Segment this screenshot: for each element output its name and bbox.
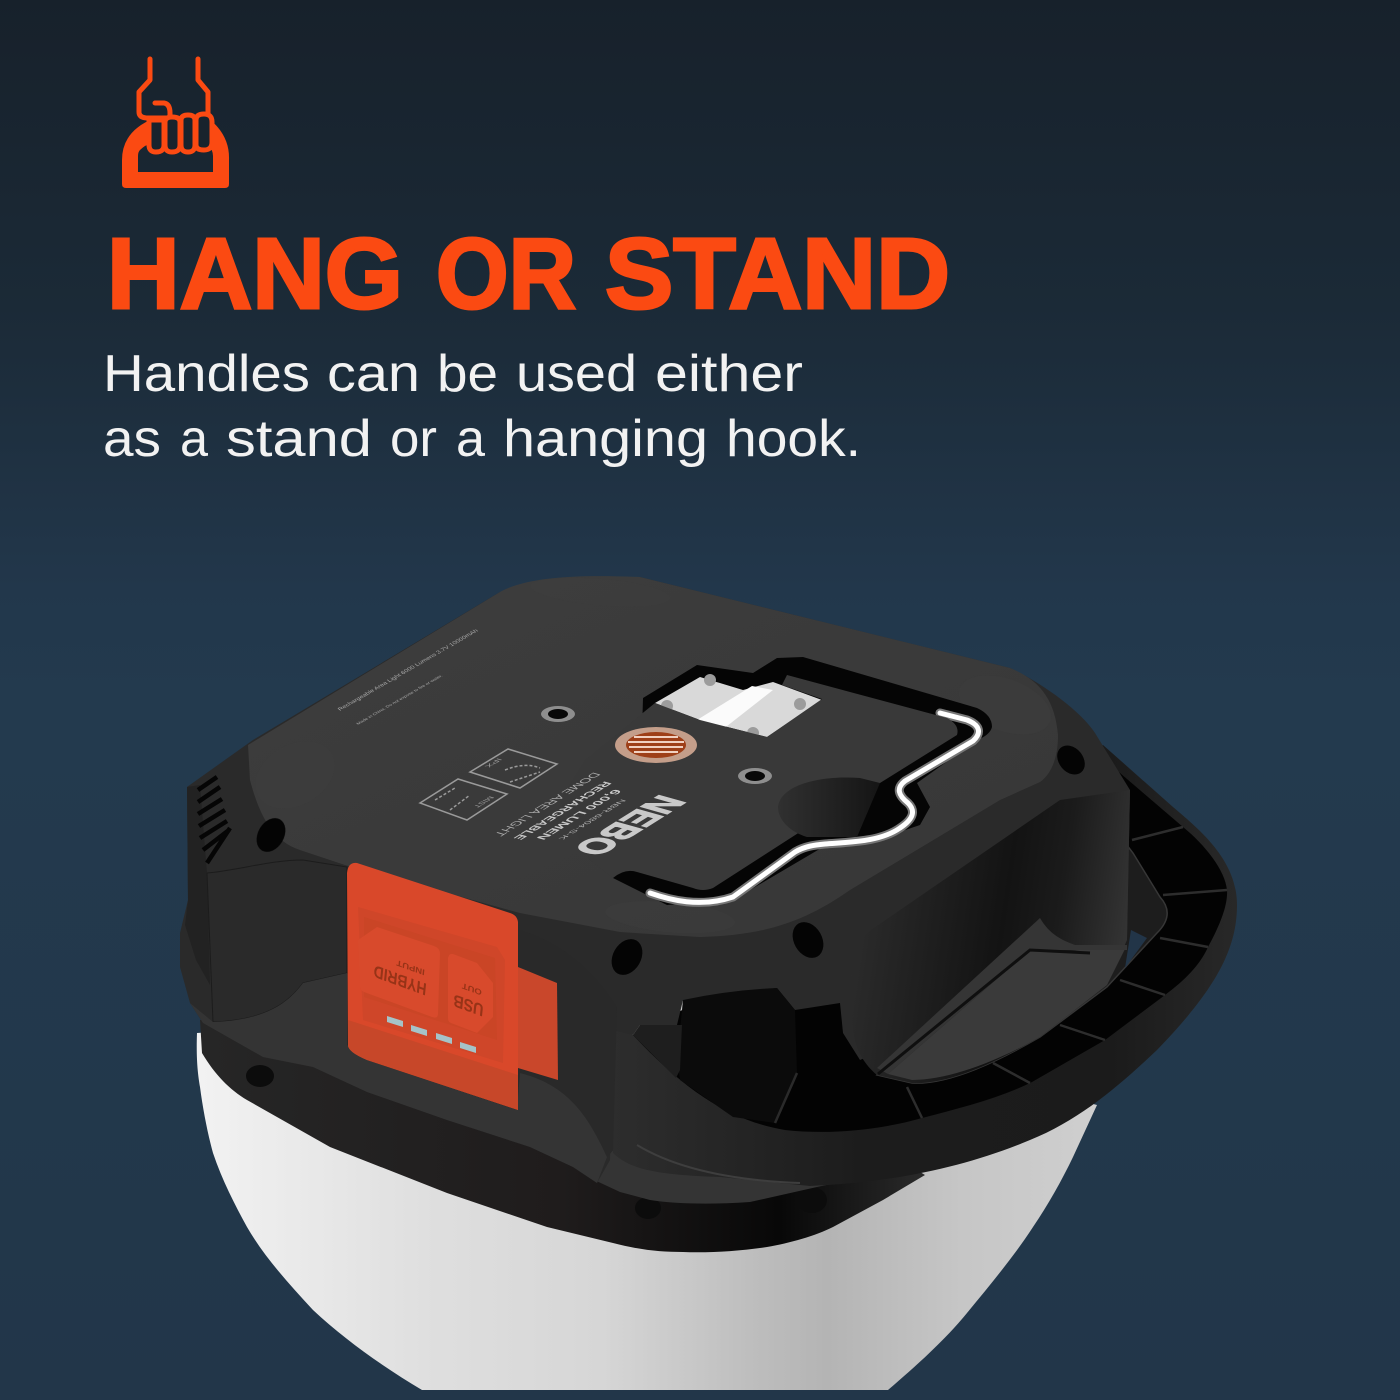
- handle ribs: [907, 827, 1227, 1118]
- title: [107, 218, 950, 330]
- body text: a: [180, 410, 208, 468]
- screws: [541, 706, 772, 784]
- gap in handle: [1125, 930, 1147, 968]
- body text: stand: [226, 410, 372, 468]
- rating labels: [470, 757, 503, 808]
- port labels: INPUT: [396, 958, 425, 977]
- port labels: [373, 958, 484, 1020]
- dark collar: [200, 1000, 925, 1252]
- collar screws: [246, 1065, 827, 1219]
- title: STAND: [605, 218, 950, 330]
- body text: hanging: [503, 410, 708, 468]
- label text: RECHARGEABLE: [510, 780, 614, 841]
- cover plate: [560, 675, 958, 890]
- wire handle: [650, 713, 979, 902]
- body text: can: [327, 345, 420, 403]
- rating labels: MIST: [470, 795, 495, 808]
- title: HANG: [107, 218, 403, 330]
- label text: DOME AREA LIGHT: [491, 771, 603, 837]
- body vents: [198, 777, 230, 863]
- left edge strip: [185, 785, 210, 985]
- label text: NBR-6804-S-K: [556, 798, 627, 840]
- body text: a: [456, 410, 485, 468]
- logo: NEBO: NEBO: [563, 792, 695, 859]
- lower lip: [590, 1150, 860, 1204]
- body text: hook.: [726, 410, 861, 468]
- body shell: [180, 577, 1130, 1183]
- regulatory text: Rechargeable Area Light 6000 Lumens 3.7V 10000mAh: [337, 628, 480, 712]
- body text: as: [103, 410, 161, 468]
- thumb scoop: [778, 777, 880, 837]
- icon: hand gripping handle: [122, 59, 229, 188]
- handle inner flange: [877, 800, 1167, 1083]
- body text: used: [516, 345, 637, 403]
- label text: [491, 771, 627, 841]
- body text: either: [655, 345, 803, 403]
- handle slot: [613, 657, 992, 905]
- port cover: [347, 863, 558, 1110]
- body text: Handles: [103, 345, 310, 403]
- front side panel: [207, 860, 347, 1022]
- body text: [103, 345, 861, 468]
- port frame: [358, 907, 505, 1063]
- metal hinge: [655, 674, 822, 739]
- rating boxes: [420, 749, 557, 820]
- label text: 6,000 LUMEN: [533, 788, 624, 841]
- handle recess: [850, 790, 1130, 1083]
- usb cap: [448, 954, 493, 1033]
- lamp dome: [197, 1000, 1097, 1390]
- hybrid cap: [358, 927, 440, 1018]
- title: OR: [436, 218, 576, 330]
- regulatory text: Made in China. Do not expose to fire or water.: [355, 674, 443, 726]
- body text: be: [437, 345, 498, 403]
- product: NEBO area light: [180, 573, 1237, 1390]
- tripod insert: [615, 727, 697, 763]
- face corner lobes: [244, 573, 1059, 938]
- handle highlight: [637, 1145, 800, 1183]
- dark recess under body: [677, 988, 797, 1123]
- lower cover shade: [348, 1020, 518, 1110]
- body holes: [251, 740, 1090, 980]
- recess shelf: [888, 945, 1127, 1080]
- rating labels: IPX: [482, 757, 503, 768]
- handle ring: [613, 745, 1237, 1186]
- port labels: HYBRID: [373, 961, 427, 999]
- lower left shell: [190, 973, 607, 1183]
- right side panel: [520, 930, 617, 1157]
- port labels: USB: [452, 990, 484, 1020]
- port labels: OUT: [461, 981, 482, 997]
- indicator LEDs: [387, 1016, 476, 1053]
- top face: [248, 576, 1058, 937]
- body text: or: [390, 410, 437, 468]
